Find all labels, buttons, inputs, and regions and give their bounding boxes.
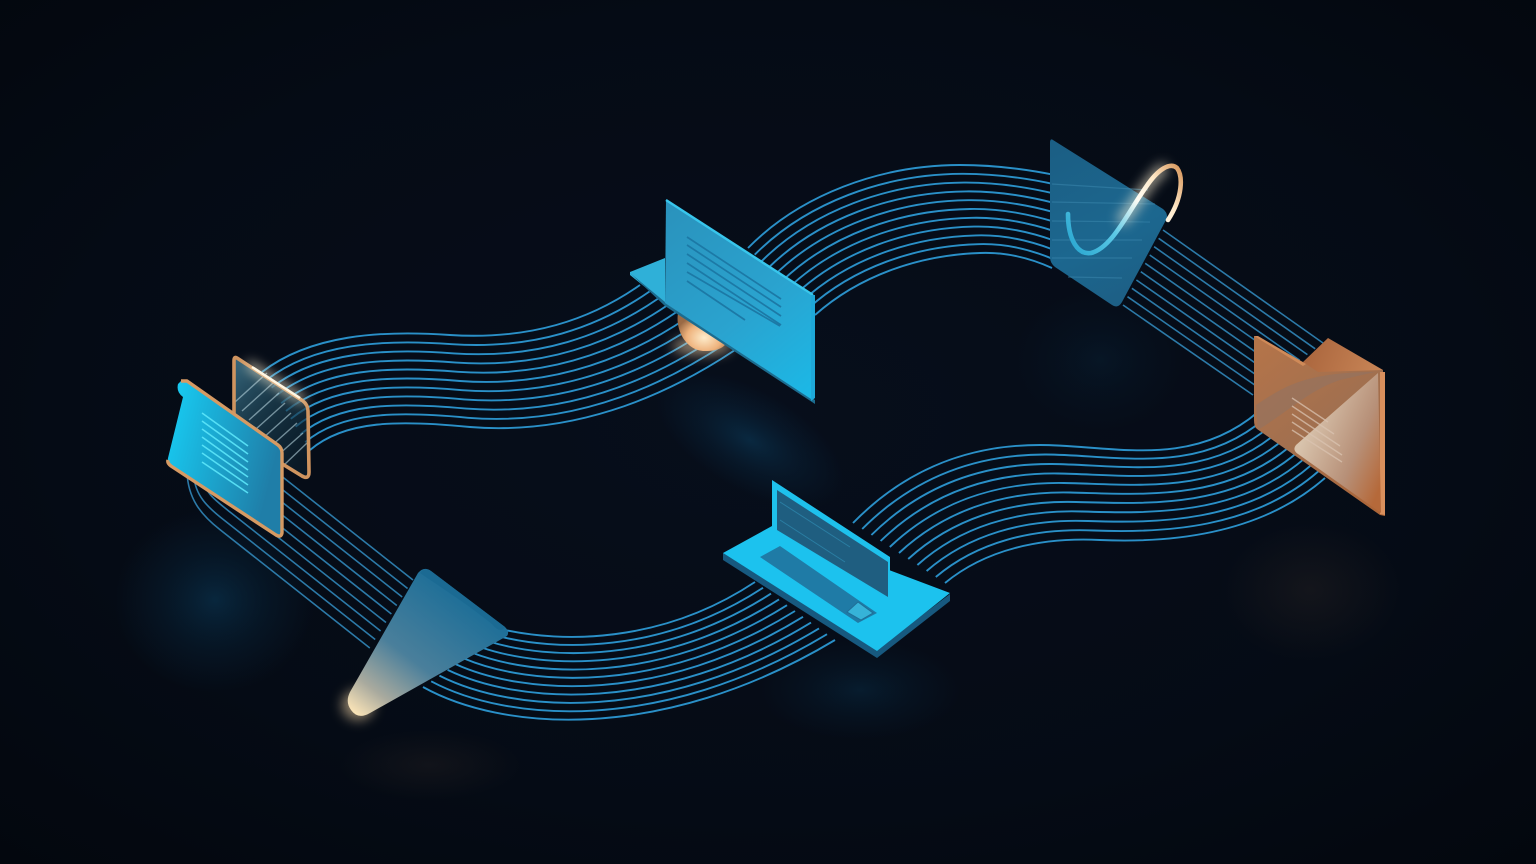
- text lines: [202, 413, 248, 493]
- ribbon: card to screen: [262, 285, 735, 450]
- ribbon: shield to folder: [1123, 230, 1323, 395]
- top edge glow: [248, 364, 304, 401]
- trackpad button: [847, 602, 873, 620]
- pale lines seen through glass: [235, 373, 307, 465]
- ribbon: folder to laptop: [853, 412, 1325, 583]
- check glow: [1120, 167, 1166, 222]
- ribbon: laptop to cone: [423, 582, 835, 720]
- check mark: [1068, 166, 1181, 253]
- ribbon: cone to card: [187, 462, 413, 648]
- rim: [666, 200, 813, 295]
- keyboard bar: [760, 546, 877, 623]
- icon: glass back card: [234, 357, 309, 477]
- inner swoosh: [1256, 372, 1375, 430]
- darker top rim: [420, 569, 505, 630]
- folder body: [1254, 336, 1385, 516]
- screen panel: [665, 200, 811, 399]
- text lines: [687, 237, 781, 326]
- folder tab: [1303, 338, 1383, 380]
- icon: copper folder: [1254, 336, 1385, 516]
- icon: half sphere lamp: [672, 313, 732, 355]
- screen: [772, 480, 890, 600]
- icon: glass shield with check: [1050, 139, 1181, 306]
- icon: laptop: [723, 480, 950, 658]
- copper edge: [168, 381, 282, 536]
- base flap: [630, 258, 677, 313]
- faint lines through glass: [1052, 184, 1155, 278]
- ribbon: screen to shield: [748, 165, 1055, 315]
- floor glows and shadows: [115, 290, 1400, 800]
- icon: document card: [168, 381, 282, 536]
- base: [723, 553, 950, 658]
- text lines: [1292, 398, 1342, 462]
- cream fold triangle: [1294, 373, 1381, 513]
- icon: light cone: [342, 569, 508, 720]
- icon: standing screen: [630, 200, 815, 404]
- copper frame: [234, 357, 309, 477]
